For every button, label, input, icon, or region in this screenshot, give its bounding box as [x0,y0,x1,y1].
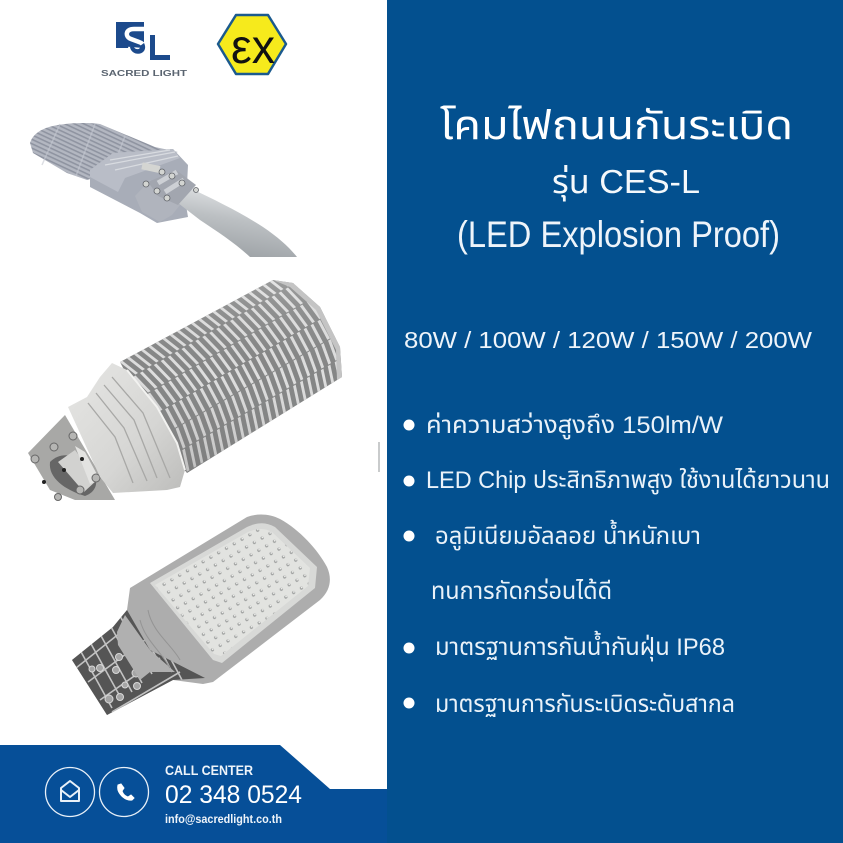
product image: street lamp on pole [30,123,297,257]
text: phone number: 02 348 0524 [165,781,302,809]
text: email: info@sacredlight.co.th [165,814,282,826]
small stray mark [378,442,380,472]
icon: envelope in circle [46,768,94,816]
text: wattage options: 80W / 100W / 120W / 150W / 200W [404,327,812,353]
feature: aluminium alloy [404,519,701,605]
product image: LED lens lamp [72,515,330,715]
subtitle: model: รุ่น CES-L [552,163,700,202]
logo: Ex explosion proof mark: εx [231,21,275,74]
feature: LED chip: LED Chip ประสิทธิภาพสูง ใช้งานได้ยาวนาน [426,467,830,495]
panel: blue specifications background [387,0,843,843]
footer: blue contact banner [0,745,387,843]
feature: IP68: มาตรฐานการกันน้ำกันฝุ่น IP68 [435,630,725,662]
feature: explosion proof standard: มาตรฐานการกันระเบิดระดับสากล [435,691,735,718]
logo: Sacred Light [101,22,187,78]
logo: Ex explosion proof mark [218,15,286,74]
text: call center label: CALL CENTER [165,763,253,778]
feature: luminous efficacy: ค่าความสว่างสูงถึง 150lm/W [426,411,723,440]
feature: aluminium alloy: อลูมิเนียมอัลลอย น้ำหนักเบา [435,519,701,551]
logo: Sacred Light: SACRED LIGHT [101,69,187,78]
product image: heat-sink lamp [28,280,342,501]
subtitle: LED Explosion Proof: (LED Explosion Proof) [457,214,780,255]
title: product name Thai: โคมไฟถนนกันระเบิด [440,104,793,148]
feature list [404,411,830,718]
panel: white product background [0,0,387,843]
feature: aluminium alloy: ทนการกัดกร่อนได้ดี [431,577,612,605]
icon: telephone in circle [100,768,148,816]
